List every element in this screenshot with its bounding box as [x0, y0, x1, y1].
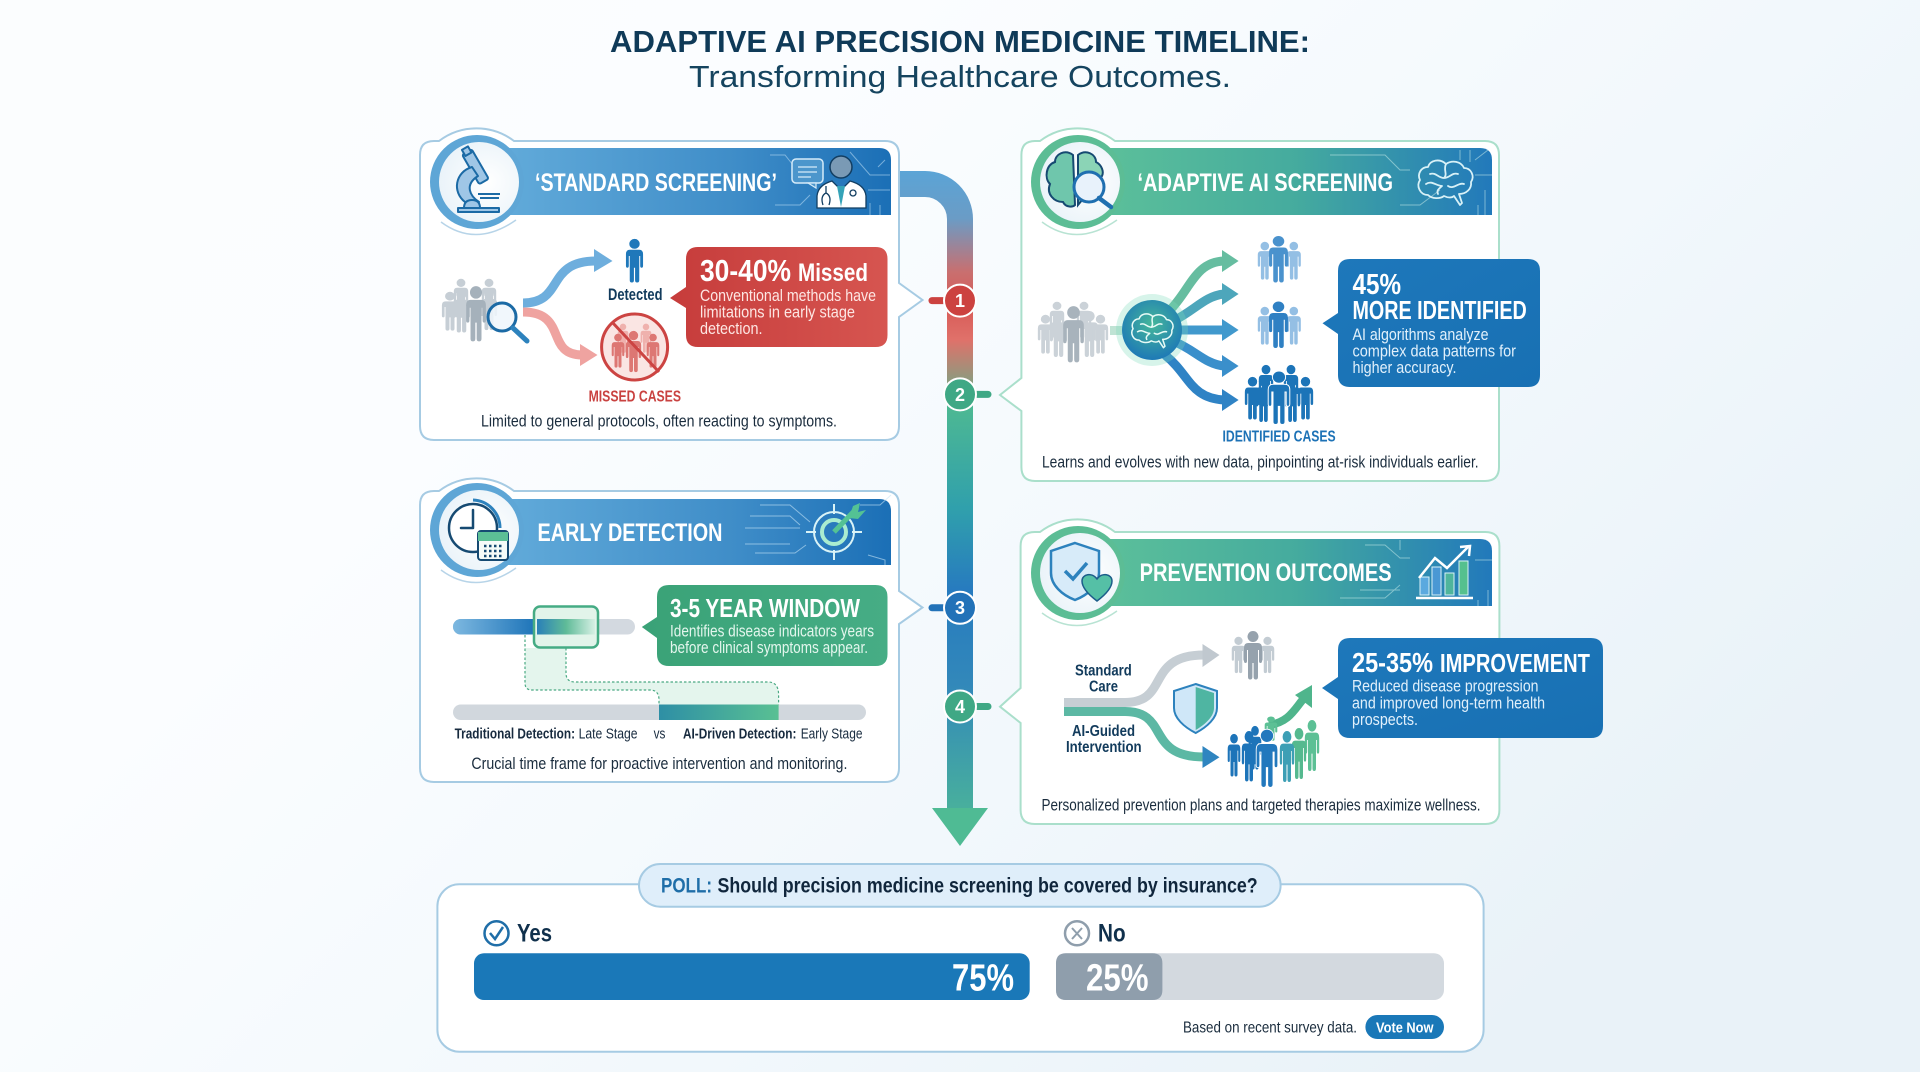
header band: [500, 148, 891, 215]
chart: detection window: [453, 606, 866, 720]
icon: detected person: [626, 239, 643, 283]
button: vote now: Vote Now: [1376, 1020, 1434, 1037]
heading: PREVENTION OUTCOMES: [1140, 559, 1392, 587]
icon: identified group middle: [1258, 301, 1301, 348]
poll question: POLL:: [661, 874, 712, 897]
callout: 45% more identified: complex data patterns for: [1352, 342, 1516, 361]
label: detection comparison: vs: [654, 725, 665, 742]
timeline marker 2: 2: [955, 385, 965, 405]
description: Crucial time frame for proactive intervention and monitoring.: [471, 754, 847, 773]
option: no: No: [1098, 920, 1126, 948]
label: detection comparison: Late Stage: [579, 725, 638, 742]
title: [610, 24, 1310, 94]
callout: 30-40% missed: 30-40%: [700, 253, 791, 288]
icon: improved crowd: [1228, 716, 1319, 787]
icon: grey crowd: [1038, 302, 1122, 362]
callout: 25-35% improvement: [1322, 638, 1603, 738]
callout: 25-35% improvement: 25-35%: [1352, 647, 1433, 678]
button: vote now: [1365, 1015, 1444, 1039]
callout: 3-5 year window: Identifies disease indicators years: [670, 622, 874, 641]
label: detection comparison: AI-Driven Detection:: [683, 725, 796, 742]
note: survey source: Based on recent survey data.: [1183, 1020, 1357, 1037]
option: yes: Yes: [517, 920, 552, 948]
timeline marker 4: 4: [955, 697, 965, 717]
icon: microscope badge: [430, 135, 524, 235]
icon: shield: [1174, 684, 1217, 733]
icon: growth chart: [1416, 546, 1473, 598]
callout: 45% more identified: [1322, 259, 1540, 387]
callout: 30-40% missed: [670, 247, 888, 347]
icon: brain outline: [1418, 160, 1473, 205]
callout: 45% more identified: MORE IDENTIFIED: [1352, 295, 1527, 325]
heading: ‘STANDARD SCREENING’: [535, 169, 777, 197]
arrows: branching to identified groups: [1165, 250, 1239, 411]
header band: [1100, 539, 1492, 606]
panel: early detection: [420, 478, 922, 782]
label: detection comparison: Early Stage: [801, 725, 862, 742]
timeline marker 1: 1: [955, 291, 965, 311]
arrow: detected: [523, 249, 612, 303]
icon: identified group large: [1245, 365, 1313, 424]
icon: crowd with magnifier: [442, 279, 527, 341]
title: ADAPTIVE AI PRECISION MEDICINE TIMELINE:: [610, 24, 1310, 59]
label: missed cases: MISSED CASES: [589, 389, 681, 406]
labels: standard care and ai-guided intervention: [1066, 663, 1142, 756]
callout: 25-35% improvement: IMPROVEMENT: [1440, 648, 1590, 678]
description: Personalized prevention plans and targeted therapies maximize wellness.: [1042, 796, 1480, 815]
icon: brain and magnifier badge: [1031, 135, 1125, 235]
timeline marker 1: [932, 285, 976, 317]
timeline arrow: [899, 184, 988, 846]
icon: ai brain node: [1116, 294, 1188, 366]
poll question: Should precision medicine screening be covered by insurance?: [718, 874, 1258, 897]
callout: 3-5 year window: before clinical symptoms appear.: [670, 638, 868, 657]
callout: 25-35% improvement: and improved long-term health: [1352, 693, 1545, 712]
heading: ‘ADAPTIVE AI SCREENING: [1138, 169, 1393, 197]
description: Learns and evolves with new data, pinpointing at-risk individuals earlier.: [1042, 452, 1479, 471]
callout: 45% more identified: 45%: [1352, 269, 1401, 301]
callout: 3-5 year window: [642, 585, 888, 666]
callout: 25-35% improvement: Reduced disease progression: [1352, 677, 1538, 696]
panel: adaptive ai screening: [1000, 128, 1540, 481]
description: Limited to general protocols, often reacting to symptoms.: [481, 412, 837, 431]
panel: prevention outcomes: [1000, 519, 1603, 824]
callout: 45% more identified: higher accuracy.: [1352, 358, 1456, 377]
labels: standard care and ai-guided intervention: Intervention: [1066, 739, 1142, 756]
option: yes: [484, 920, 552, 948]
icon: growth arrow: [1269, 685, 1312, 725]
labels: standard care and ai-guided intervention: AI-Guided: [1072, 723, 1135, 740]
arrow: missed: [523, 312, 598, 366]
callout: 30-40% missed: Conventional methods have: [700, 286, 876, 305]
callout: 25-35% improvement: prospects.: [1352, 710, 1418, 729]
label: detection comparison: Traditional Detection:: [455, 725, 575, 742]
callout: 30-40% missed: detection.: [700, 319, 762, 338]
timeline marker 3: 3: [955, 598, 965, 618]
bar: yes 75%: [474, 953, 1030, 1000]
title: Transforming Healthcare Outcomes.: [689, 59, 1231, 94]
arrow: standard care: [1064, 644, 1220, 702]
timeline marker 4: [944, 690, 988, 722]
bar: yes 75%: 75%: [952, 958, 1014, 1000]
timeline marker 3: [932, 592, 976, 624]
icon: doctor: [792, 156, 866, 208]
labels: standard care and ai-guided intervention: Care: [1089, 679, 1118, 696]
label: detected: Detected: [608, 285, 662, 304]
poll question: [639, 864, 1281, 907]
arrow: ai-guided: [1064, 712, 1220, 768]
callout: 30-40% missed: Missed: [798, 259, 868, 287]
icon: clock and calendar badge: [430, 483, 524, 583]
icon: target: [806, 503, 866, 560]
callout: 30-40% missed: limitations in early stage: [700, 303, 855, 322]
icon: identified group top: [1258, 236, 1301, 283]
label: identified cases: IDENTIFIED CASES: [1222, 429, 1336, 446]
labels: standard care and ai-guided intervention: Standard: [1075, 663, 1132, 680]
panel: standard screening: [420, 128, 922, 440]
icon: shield and heart badge: [1031, 526, 1125, 626]
header band: [500, 495, 891, 565]
option: no: [1065, 920, 1126, 948]
callout: 45% more identified: AI algorithms analyze: [1352, 325, 1488, 344]
icon: grey group: [1232, 631, 1274, 680]
icon: missed cases: [602, 314, 668, 380]
label: detection comparison: [455, 725, 862, 742]
callout: 3-5 year window: 3-5 YEAR WINDOW: [670, 593, 860, 623]
header band: [1100, 148, 1492, 215]
timeline marker 2: [944, 378, 988, 410]
bar: no 25%: [1056, 953, 1444, 1000]
bar: no 25%: 25%: [1086, 958, 1148, 1000]
heading: EARLY DETECTION: [538, 519, 722, 547]
panel: poll: [437, 864, 1484, 1052]
